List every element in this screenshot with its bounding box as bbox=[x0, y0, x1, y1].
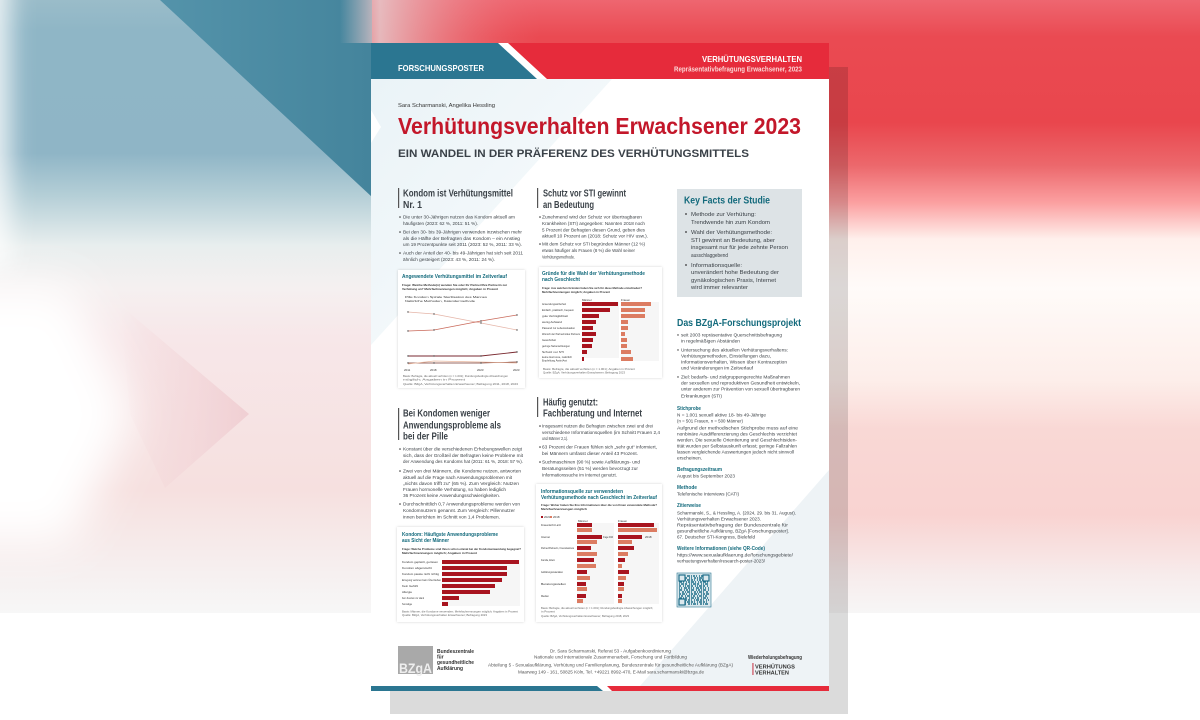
panel: Key Facts der Studie: insgesamt nur für jede zehnte Person bbox=[691, 245, 788, 251]
chart card: Informationsquelle zur verwendeten Verhütungsmethode: Frauen bbox=[618, 519, 628, 523]
chart card: Kondom häufigste Anwendungsprobleme: Quelle: BZgA, Verhütungsverhalten Erwachsener; Befragung 2023 bbox=[402, 613, 488, 617]
chart card: Gründe für die Wahl der Verhütungsmethode: Frage: Aus welchen Gründen haben Sie sich für diese Methode entschieden? bbox=[542, 286, 642, 290]
section: Schutz vor STI gewinnt an Bedeutung: Zunehmend wird der Schutz vor übertragbaren bbox=[542, 215, 642, 220]
chart card: Informationsquelle zur verwendeten Verhütungsmethode: Informationsquelle zur verwendeten bbox=[541, 489, 623, 495]
bar chart: Männer / Frauen bbox=[542, 302, 659, 362]
section: Schutz vor STI gewinnt an Bedeutung: 5 Prozent der Befragten diesen Grund, geben dies bbox=[542, 227, 646, 232]
text block: project bullets: Erkrankungen (STI) bbox=[681, 394, 722, 399]
section: Schutz vor STI gewinnt an Bedeutung: Verhütungsmethode. bbox=[542, 254, 575, 259]
section: Kondom ist Verhütungsmittel Nr. 1: ähnlich gesteigert (2023: 43 %, 2011: 24 %). bbox=[403, 257, 495, 262]
chart card: Angewendete Verhütungsmittel im Zeitverlauf: Pille Kondom Spirale Sterilisation des Mannes bbox=[405, 295, 488, 299]
bar chart: Männer / Frauen: gute Verträglichkeit bbox=[542, 314, 568, 318]
chart card: Angewendete Verhütungsmittel im Zeitverlauf bbox=[398, 270, 525, 388]
section: Häufig genutzt: Fachberatung und Internet: Fachberatung und Internet bbox=[543, 408, 642, 420]
section: Kondom ist Verhütungsmittel Nr. 1: Kondom ist Verhütungsmittel bbox=[403, 188, 513, 200]
header band bbox=[371, 43, 829, 79]
text block: Stichprobe: (n = 501 Frauen, n = 500 Männer) bbox=[677, 419, 743, 424]
chart card: Angewendete Verhütungsmittel im Zeitverlauf: Quelle: BZgA, Verhütungsverhalten Erwachsener; Befragung 2011, 2018, 2023 bbox=[403, 382, 519, 386]
text block: Methode: Telefonische Interviews (CATI) bbox=[677, 492, 739, 497]
text block: Weitere Informationen: https://www.sexualaufklaerung.de/forschungsgebiete/ bbox=[677, 553, 794, 558]
chart card: Kondom häufigste Anwendungsprobleme bbox=[397, 527, 524, 622]
icon: QR code bbox=[677, 573, 711, 607]
text block: Zitierweise: 67. Deutscher STI-Kongress, Bielefeld bbox=[677, 535, 755, 540]
section: Bei Kondomen weniger Anwendungsprobleme: Durchschnittlich 0,7 Anwendungsprobleme werden von bbox=[403, 502, 520, 507]
logo: BZgA: Bundeszentrale bbox=[437, 649, 474, 655]
section: Kondom ist Verhütungsmittel Nr. 1: Nr. 1 bbox=[403, 200, 422, 211]
chart card: Gründe für die Wahl der Verhütungsmethode: Gründe für die Wahl der Verhütungsmethode bbox=[542, 271, 645, 277]
footer contact text: Maarweg 149 - 161, 50825 Köln, Tel. +49221 8992-470, E-Mail sara.scharmanski@bzga.de bbox=[518, 670, 704, 675]
bar chart: Männer / Frauen: Gewohnheit bbox=[542, 338, 556, 342]
section: Schutz vor STI gewinnt an Bedeutung: Schutz vor STI gewinnt bbox=[543, 188, 626, 200]
chart card: Gründe für die Wahl der Verhütungsmethode: Quelle: BZgA, Verhütungsverhalten Erwachsener; Befragung 2023 bbox=[543, 370, 626, 374]
header sublabel: Repräsentativbefragung Erwachsener, 2023 bbox=[674, 66, 802, 74]
poster drop shadow bbox=[390, 67, 848, 714]
text block: Zitierweise bbox=[677, 503, 796, 540]
section: Bei Kondomen weniger Anwendungsprobleme: 36 Prozent keine Anwendungsschwierigkeiten. bbox=[403, 493, 500, 498]
text block: Zitierweise: Repräsentativbefragung der Bundeszentrale für bbox=[677, 523, 788, 528]
section: Häufig genutzt: Fachberatung und Internet: Informationssuche im Internet genutzt. bbox=[542, 472, 617, 477]
text block: project bullets: Ziel: bedarfs- und zielgruppengerechte Maßnahmen bbox=[681, 375, 790, 380]
chart card: Gründe für die Wahl der Verhütungsmethode: Männer bbox=[582, 298, 592, 302]
bar chart: Männer / Frauen: Wunsch der Partnerin/des Partners bbox=[542, 332, 580, 336]
section: Häufig genutzt: Fachberatung und Internet: Beratungsseiten (51 %) werden bevorzugt zur bbox=[542, 466, 638, 471]
section: Kondom ist Verhütungsmittel Nr. 1: Auch der Anteil der 40- bis 49-Jährigen hat sich seit 2011 bbox=[403, 251, 523, 256]
chart card: Gründe für die Wahl der Verhütungsmethode: Frauen bbox=[621, 298, 631, 302]
logo: BZgA: Aufklärung bbox=[437, 666, 463, 672]
bar chart: Anwendungsprobleme: Kein Gefühl bbox=[402, 584, 418, 588]
subtitle: EIN WANDEL IN DER PRÄFERENZ DES VERHÜTUNGSMITTELS bbox=[398, 147, 750, 160]
text block: Stichprobe: lassen vergleichende Auswertungen jedoch nicht sinnvoll bbox=[677, 450, 794, 455]
chart card: Angewendete Verhütungsmittel im Zeitverlauf: 2023 bbox=[477, 368, 484, 372]
chart card: Informationsquelle zur verwendeten Verhütungsmethode: in Prozent bbox=[541, 610, 555, 614]
section: Bei Kondomen weniger Anwendungsprobleme: Anwendungsprobleme als bbox=[403, 420, 501, 432]
text block: Stichprobe: Stichprobe bbox=[677, 406, 701, 412]
text block: Befragungszeitraum: August bis September 2023 bbox=[677, 474, 735, 479]
section: Schutz vor STI gewinnt an Bedeutung: an Bedeutung bbox=[543, 200, 594, 211]
bar chart: Männer / Frauen: Anwendungssicherheit bbox=[542, 302, 566, 306]
section: Kondom ist Verhütungsmittel Nr. 1: häufigsten (2023: 62 %, 2011: 51 %). bbox=[403, 221, 478, 226]
text block: project bullets: seit 2003 repräsentative Querschnittsbefragung bbox=[681, 333, 782, 338]
footer band bbox=[371, 686, 829, 691]
panel: Key Facts der Studie: wird immer relevanter bbox=[690, 285, 748, 291]
grouped bar chart: Beratungsstellen bbox=[541, 582, 566, 586]
chart card: Angewendete Verhütungsmittel im Zeitverlauf: 2023 bbox=[513, 368, 520, 372]
panel: Key Facts der Studie bbox=[677, 189, 802, 297]
legend: 2023 bbox=[544, 515, 551, 519]
text block: project bullets bbox=[677, 333, 800, 399]
text block: Stichprobe: werden. Die sexuelle Orientierung und Geschlechtsiden- bbox=[677, 438, 797, 443]
grouped bar chart: 2018 bbox=[645, 535, 652, 539]
logo: BZgA: für bbox=[437, 654, 444, 660]
chart card: Gründe für die Wahl der Verhütungsmethode: Basis: Befragte, die aktuell verhüten (n = 1.001); Angaben in Prozent bbox=[543, 367, 635, 371]
heading: Das BZgA-Forschungsprojekt: Das BZgA-Forschungsprojekt bbox=[677, 318, 802, 329]
grouped bar chart: Aufklärungsmaterialien bbox=[541, 570, 563, 574]
chart card: Informationsquelle zur verwendeten Verhütungsmethode: Quelle: BZgA, Verhütungsverhalten Erwachsener; Befragung 2018, 2023 bbox=[541, 614, 630, 618]
panel: Key Facts der Studie: Wahl der Verhütungsmethode: bbox=[691, 230, 772, 236]
grouped bar chart: Frage 2023 bbox=[603, 535, 613, 539]
chart card: Gründe für die Wahl der Verhütungsmethode: Mehrfachnennungen möglich; Angaben in Prozent bbox=[542, 290, 610, 294]
text block: Weitere Informationen bbox=[677, 546, 794, 564]
logo: BZgA bbox=[398, 646, 474, 676]
grouped bar chart bbox=[541, 523, 659, 604]
chart card: Informationsquelle zur verwendeten Verhütungsmethode: Frage: Woher haben Sie Ihre Informationen über die von Ihnen verwendete Methode? bbox=[541, 503, 657, 507]
section: Bei Kondomen weniger Anwendungsprobleme: der Anwendung des Kondoms hat (2011: 61 %, 2018: 57 %). bbox=[403, 459, 523, 464]
section: Schutz vor STI gewinnt an Bedeutung bbox=[537, 188, 648, 259]
chart card: Gründe für die Wahl der Verhütungsmethode bbox=[539, 267, 662, 378]
title: Verhütungsverhalten Erwachsener 2023 bbox=[398, 113, 801, 139]
section: Kondom ist Verhütungsmittel Nr. 1: als die Hälfte der Befragten das Kondom – ein Anstieg bbox=[403, 236, 520, 241]
bar chart: Anwendungsprobleme: Allergie bbox=[402, 590, 412, 594]
text block: project bullets: unter anderem zur Prävention von sexuell übertragbaren bbox=[681, 387, 800, 392]
panel: Key Facts der Studie: Informationsquelle: bbox=[691, 263, 742, 269]
grouped bar chart: Internet bbox=[541, 535, 550, 539]
legend: 2018 bbox=[553, 515, 560, 519]
grouped bar chart: Frauenärztin/-arzt bbox=[541, 523, 561, 527]
text block: project bullets: Verhütungsmethoden, Einstellungen dazu, bbox=[681, 354, 771, 359]
text block: project bullets: in regelmäßigen Abständen bbox=[681, 339, 740, 344]
text block: Methode: Methode bbox=[677, 485, 697, 491]
key facts heading: Key Facts der Studie bbox=[684, 196, 770, 206]
bar chart: Anwendungsprobleme: Kondom abgerutscht bbox=[402, 566, 432, 570]
section: Bei Kondomen weniger Anwendungsprobleme: „nichts davon trifft zu“ (65 %). Zum Vergleich: Nutzen bbox=[403, 481, 519, 486]
footer contact text bbox=[488, 649, 733, 675]
panel: Key Facts der Studie: gynäkologischen Praxis, Internet bbox=[691, 278, 776, 284]
grouped bar chart: Medien bbox=[541, 594, 549, 598]
section: Bei Kondomen weniger Anwendungsprobleme: sich, dass der Großteil der Befragten keine Probleme mit bbox=[403, 453, 524, 458]
chart card: Kondom häufigste Anwendungsprobleme: Basis: Männer, die Kondome verwenden; Mehrfachnennungen möglich; Angaben in Prozent bbox=[402, 610, 518, 614]
text block: Methode bbox=[677, 485, 739, 497]
chart card: Informationsquelle zur verwendeten Verhütungsmethode bbox=[536, 484, 662, 622]
chart card: Angewendete Verhütungsmittel im Zeitverlauf: Frage: Welche Methode(n) wenden Sie oder Ihr Partner/Ihre Partnerin zur bbox=[402, 283, 508, 287]
grouped bar chart: Partner/Partnerin, Freundeskreis bbox=[541, 546, 574, 550]
text block: Stichprobe: erscheinen. bbox=[677, 456, 702, 461]
text block: project bullets: Informationsverhalten, Wissen über Kontrazeption bbox=[681, 360, 787, 365]
panel: Key Facts der Studie: unverändert hohe Bedeutung der bbox=[691, 270, 779, 276]
bar chart: Anwendungsprobleme bbox=[402, 560, 520, 606]
text block: Befragungszeitraum: Befragungszeitraum bbox=[677, 467, 723, 473]
section: Schutz vor STI gewinnt an Bedeutung: aktuell 10 Prozent an (2018: Schutz vor HIV usw.). bbox=[542, 234, 648, 239]
text block: project bullets: und Veränderungen im Zeitverlauf bbox=[681, 366, 754, 371]
chart card: Angewendete Verhütungsmittel im Zeitverlauf: möglich; Angaben in Prozent bbox=[403, 378, 466, 382]
chart card: Informationsquelle zur verwendeten Verhütungsmethode: Basis: Befragte, die aktuell verhüten (n = 1.001); Rundungsbedingte Abweichungen möglich; bbox=[541, 606, 653, 610]
bar chart: Männer / Frauen: keine Hormone, natürlich bbox=[542, 355, 572, 359]
chart card: Kondom häufigste Anwendungsprobleme: Mehrfachnennungen möglich; Angaben in Prozent bbox=[402, 551, 477, 555]
text block: Befragungszeitraum bbox=[677, 467, 735, 479]
bar chart: Anwendungsprobleme: Sonstige bbox=[402, 602, 412, 606]
panel: Key Facts der Studie: Methode zur Verhütung: bbox=[691, 212, 756, 218]
text block: Zitierweise: Verhütungsverhalten Erwachsener 2023. bbox=[677, 517, 761, 522]
footer contact text: Dr. Sara Scharmanski, Referat 53 - Aufgabenkoordinierung bbox=[550, 649, 671, 654]
chart card: Informationsquelle zur verwendeten Verhütungsmethode: Mehrfachnennungen möglich bbox=[541, 507, 587, 511]
section: Häufig genutzt: Fachberatung und Internet: 63 Prozent der Frauen fühlen sich „sehr gut“ informiert, bbox=[542, 445, 657, 450]
grouped bar chart: Familie, Eltern bbox=[541, 558, 555, 562]
section: Bei Kondomen weniger Anwendungsprobleme: Frauen hormonelle Verhütung, so haben lediglich bbox=[403, 487, 506, 492]
section: Bei Kondomen weniger Anwendungsprobleme: Konstant über die verschiedenen Erhebungswellen zeigt bbox=[403, 447, 523, 452]
chart card: Gründe für die Wahl der Verhütungsmethode: nach Geschlecht bbox=[542, 277, 580, 283]
logo: Wiederholungsbefragung Verhütungsverhalten: VERHALTEN bbox=[755, 670, 789, 676]
text block: Stichprobe: Aufgrund der methodischen Stichprobe muss auf eine bbox=[677, 426, 798, 431]
logo: BZgA: BZgA bbox=[399, 661, 432, 676]
section: Kondom ist Verhütungsmittel Nr. 1: um 19 Prozentpunkte seit 2011 (2023: 52 %, 2011: 33 %). bbox=[403, 242, 522, 247]
panel: Key Facts der Studie: Trendwende hin zum Kondom bbox=[691, 220, 770, 226]
logo: BZgA: gesundheitliche bbox=[437, 660, 474, 666]
logo: Wiederholungsbefragung Verhütungsverhalten bbox=[748, 655, 802, 676]
logo: Wiederholungsbefragung Verhütungsverhalten: Wiederholungsbefragung bbox=[748, 655, 802, 661]
bar chart: Anwendungsprobleme: Kein Kondom zur Hand bbox=[402, 596, 424, 600]
bar chart: Anwendungsprobleme: Kondom passte nicht richtig bbox=[402, 572, 439, 576]
authors: Sara Scharmanski, Angelika Hessling bbox=[398, 103, 495, 109]
section: Häufig genutzt: Fachberatung und Internet: Häufig genutzt: bbox=[543, 398, 598, 408]
panel: Key Facts der Studie: ausschlaggebend bbox=[691, 253, 728, 259]
bar chart: Männer / Frauen: wenig Aufwand bbox=[542, 320, 562, 324]
section: Häufig genutzt: Fachberatung und Internet: Suchmaschinen (90 %) sowie Aufklärungs- und bbox=[542, 460, 640, 465]
section: Bei Kondomen weniger Anwendungsprobleme: bei der Pille bbox=[403, 432, 448, 442]
text block: Zitierweise: gesundheitliche Aufklärung, BZgA [Forschungsposter]. bbox=[677, 529, 789, 534]
bar chart: Männer / Frauen: Empfehlung Ärztin/Arzt bbox=[542, 358, 567, 362]
chart card: Kondom häufigste Anwendungsprobleme: Frage: Welche Probleme sind Ihnen schon einmal bei der Kondomanwendung begegnet? bbox=[402, 547, 521, 551]
logo: Wiederholungsbefragung Verhütungsverhalten: VERHÜTUNGS bbox=[755, 664, 795, 670]
text block: Stichprobe bbox=[677, 406, 798, 461]
bar chart: Anwendungsprobleme: Kondom geplatzt, gerissen bbox=[402, 560, 438, 564]
text block: Stichprobe: N = 1.001 sexuell aktive 18- bis 49-Jährige bbox=[677, 413, 766, 418]
footer contact text: Abteilung 5 - Sexualaufklärung, Verhütung und Familienplanung, Bundeszentrale für gesundheitliche Aufklärung (BZgA) bbox=[488, 663, 733, 668]
section: Kondom ist Verhütungsmittel Nr. 1 bbox=[398, 188, 523, 262]
chart card: Angewendete Verhütungsmittel im Zeitverlauf: 2018 bbox=[430, 368, 437, 372]
section: Bei Kondomen weniger Anwendungsprobleme bbox=[398, 408, 524, 519]
poster bbox=[371, 43, 829, 691]
section: Häufig genutzt: Fachberatung und Internet: verschiedene Informationsquellen (im Schnitt Frauen 2,4 bbox=[542, 430, 660, 435]
section: Häufig genutzt: Fachberatung und Internet: Insgesamt nutzen die Befragten zwischen zwei und drei bbox=[542, 424, 653, 429]
chart card: Angewendete Verhütungsmittel im Zeitverlauf: 2011 bbox=[404, 368, 411, 372]
chart card: Kondom häufigste Anwendungsprobleme: aus Sicht der Männer bbox=[402, 538, 449, 544]
footer contact text: Nationale und internationale Zusammenarbeit, Forschung und Fortbildung bbox=[534, 655, 687, 660]
section: Häufig genutzt: Fachberatung und Internet: bei Männern umfasst dieser Anteil 43 Prozent. bbox=[542, 451, 638, 456]
bar chart: Männer / Frauen: Schutz vor STI bbox=[542, 350, 564, 354]
bar chart: Männer / Frauen: Passend zur Lebenssituation bbox=[542, 326, 575, 330]
section: Kondom ist Verhütungsmittel Nr. 1: Die unter 30-Jährigen nutzen das Kondom aktuell am bbox=[403, 215, 515, 220]
text block: Weitere Informationen: Weitere Informationen (siehe QR-Code) bbox=[677, 546, 765, 552]
section: Bei Kondomen weniger Anwendungsprobleme: Kondomnutzern genannt. Zum Vergleich: Pillennutzer bbox=[403, 508, 515, 513]
chart card: Angewendete Verhütungsmittel im Zeitverlauf: Natürliche Methoden, Kalendermethode bbox=[405, 299, 476, 303]
bar chart: Männer / Frauen: Einfach, praktisch, bequem bbox=[542, 308, 575, 312]
section: Schutz vor STI gewinnt an Bedeutung: Krankheiten (STI) angegeben: Nannten 2018 noch bbox=[542, 221, 645, 226]
line chart bbox=[407, 311, 518, 364]
legend bbox=[541, 515, 560, 519]
section: Häufig genutzt: Fachberatung und Internet: und Männer 2,1). bbox=[542, 436, 568, 441]
chart card: Informationsquelle zur verwendeten Verhütungsmethode: Männer bbox=[578, 519, 588, 523]
header label: Forschungsposter: FORSCHUNGSPOSTER bbox=[398, 63, 484, 73]
section: Schutz vor STI gewinnt an Bedeutung: Mit dem Schutz vor STI begründen Männer (12 %) bbox=[542, 242, 645, 247]
section: Schutz vor STI gewinnt an Bedeutung: etwas häufiger als Frauen (8 %) die Wahl seiner bbox=[542, 248, 635, 253]
chart card: Angewendete Verhütungsmittel im Zeitverlauf: Verhütung an? Mehrfachnennungen möglich; Angaben in Prozent bbox=[402, 287, 498, 291]
text block: Stichprobe: nonbinäre Ausdifferenzierung des Geschlechts verzichtet bbox=[677, 432, 798, 437]
chart card: Informationsquelle zur verwendeten Verhütungsmethode: Verhütungsmethode nach Geschlecht im Zeitverlauf bbox=[541, 495, 657, 501]
chart card: Angewendete Verhütungsmittel im Zeitverlauf: Angewendete Verhütungsmittel im Zeitverlauf bbox=[402, 274, 507, 280]
section: Bei Kondomen weniger Anwendungsprobleme: aktuell auf die Frage nach Anwendungsproblemen mit bbox=[403, 475, 513, 480]
section: Bei Kondomen weniger Anwendungsprobleme: innen berichten im Schnitt von 1,4 Problemen. bbox=[403, 514, 500, 519]
header label: Verhütungsverhalten: VERHÜTUNGSVERHALTEN bbox=[702, 54, 802, 64]
bar chart: Männer / Frauen: geringe Nebenwirkungen bbox=[542, 344, 570, 348]
bar chart: Anwendungsprobleme: Erregung verloren beim Überziehen bbox=[402, 578, 441, 582]
chart card: Angewendete Verhütungsmittel im Zeitverlauf: Basis: Befragte, die aktuell verhüten (n = 1.001); Rundungsbedingte Abweichungen bbox=[403, 374, 509, 378]
text block: project bullets: Untersuchung des aktuellen Verhütungsverhaltens: bbox=[681, 348, 788, 353]
section: Bei Kondomen weniger Anwendungsprobleme: Zwei von drei Männern, die Kondome nutzen, antworten bbox=[403, 469, 521, 474]
text block: Weitere Informationen: verhuetungsverhalten/research-poster-2023/ bbox=[677, 559, 766, 564]
section: Bei Kondomen weniger Anwendungsprobleme: Bei Kondomen weniger bbox=[403, 408, 490, 420]
panel: Key Facts der Studie: STI gewinnt an Bedeutung, aber bbox=[691, 238, 775, 244]
section: Häufig genutzt: Fachberatung und Internet bbox=[537, 397, 660, 477]
text block: Stichprobe: tität wurden per Selbstauskunft erfasst; geringe Fallzahlen bbox=[677, 444, 797, 449]
text block: Zitierweise: Scharmanski, S., & Hessling, A. (2024, 29. bis 31. August). bbox=[677, 511, 796, 516]
chart card: Kondom häufigste Anwendungsprobleme: Kondom: Häufigste Anwendungsprobleme bbox=[402, 532, 498, 538]
text block: project bullets: der sexuellen und reproduktiven Gesundheit entwickeln, bbox=[681, 381, 800, 386]
section: Kondom ist Verhütungsmittel Nr. 1: Bei den 30- bis 39-Jährigen verwenden inzwischen mehr bbox=[403, 230, 522, 235]
text block: Zitierweise: Zitierweise bbox=[677, 503, 701, 509]
